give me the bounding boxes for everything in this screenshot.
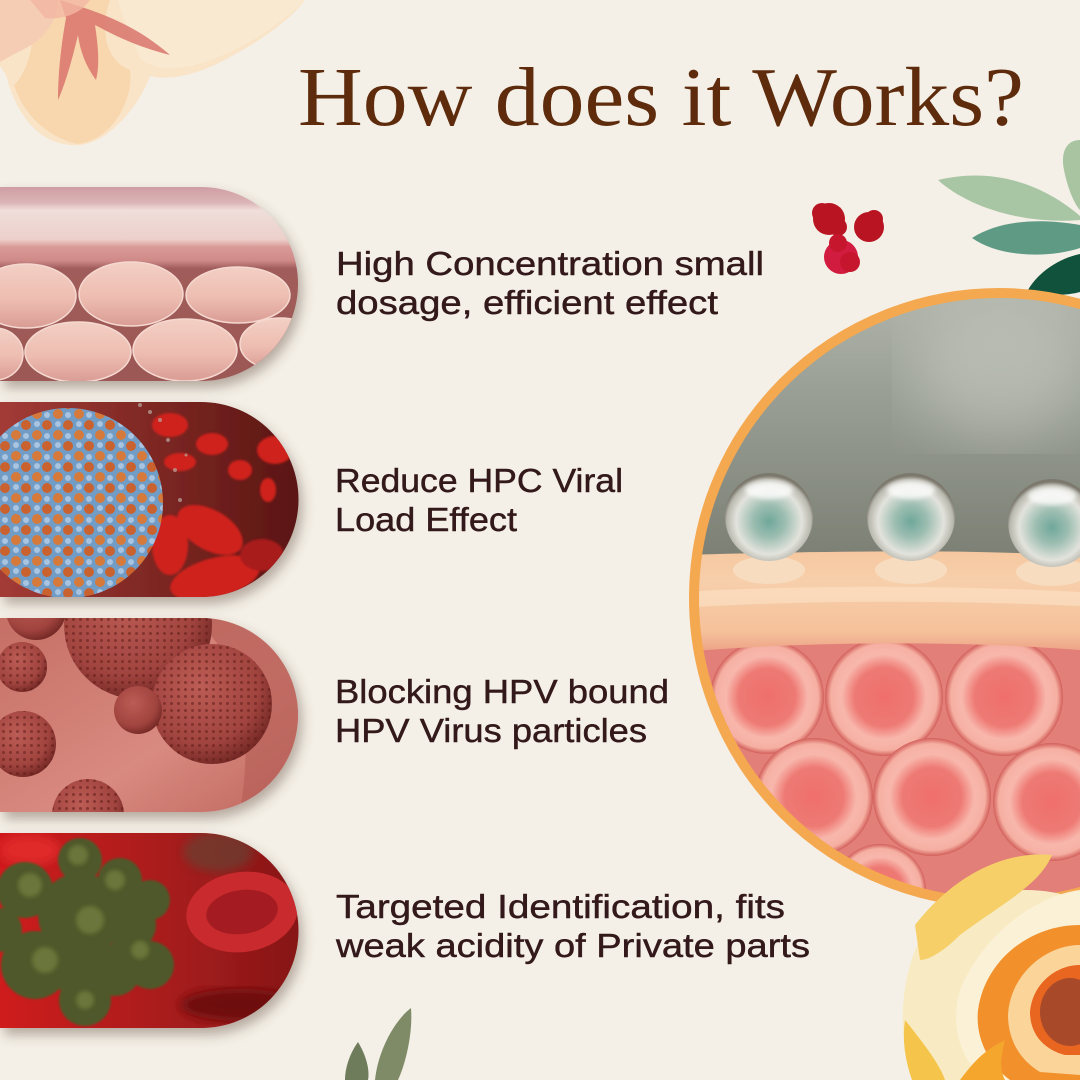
text: targeted identification [335,888,810,964]
text: blocking hpv [335,673,669,749]
decorative flower: top left [0,0,305,145]
panel: virus image [0,402,300,609]
panel: virus particles image [0,617,310,827]
title: How does it Works? [298,51,1024,144]
text: reduce viral load: Reduce HPC Viral [335,462,623,499]
text: reduce viral load [335,462,623,538]
text: high concentration: High Concentration small [336,245,764,282]
text: high concentration: dosage, efficient effect [336,284,718,321]
text: high concentration [336,245,764,321]
circle: pearl and membrane illustration [680,280,1080,936]
decorative leaves: bottom centre [345,1008,411,1080]
text: reduce viral load: Load Effect [335,501,517,538]
circle outline [694,293,1080,903]
panel: targeted identification image [0,832,303,1028]
panel: cell layer image [0,187,320,382]
text: blocking hpv: HPV Virus particles [335,712,647,749]
text: targeted identification: Targeted Identification, fits [336,888,785,925]
text: blocking hpv: Blocking HPV bound [335,673,669,710]
decorative flower: bottom right [903,854,1080,1080]
decorative red berries [812,203,884,274]
decorative leaves: top right [938,140,1080,295]
text: targeted identification: weak acidity of Private parts [335,927,810,964]
